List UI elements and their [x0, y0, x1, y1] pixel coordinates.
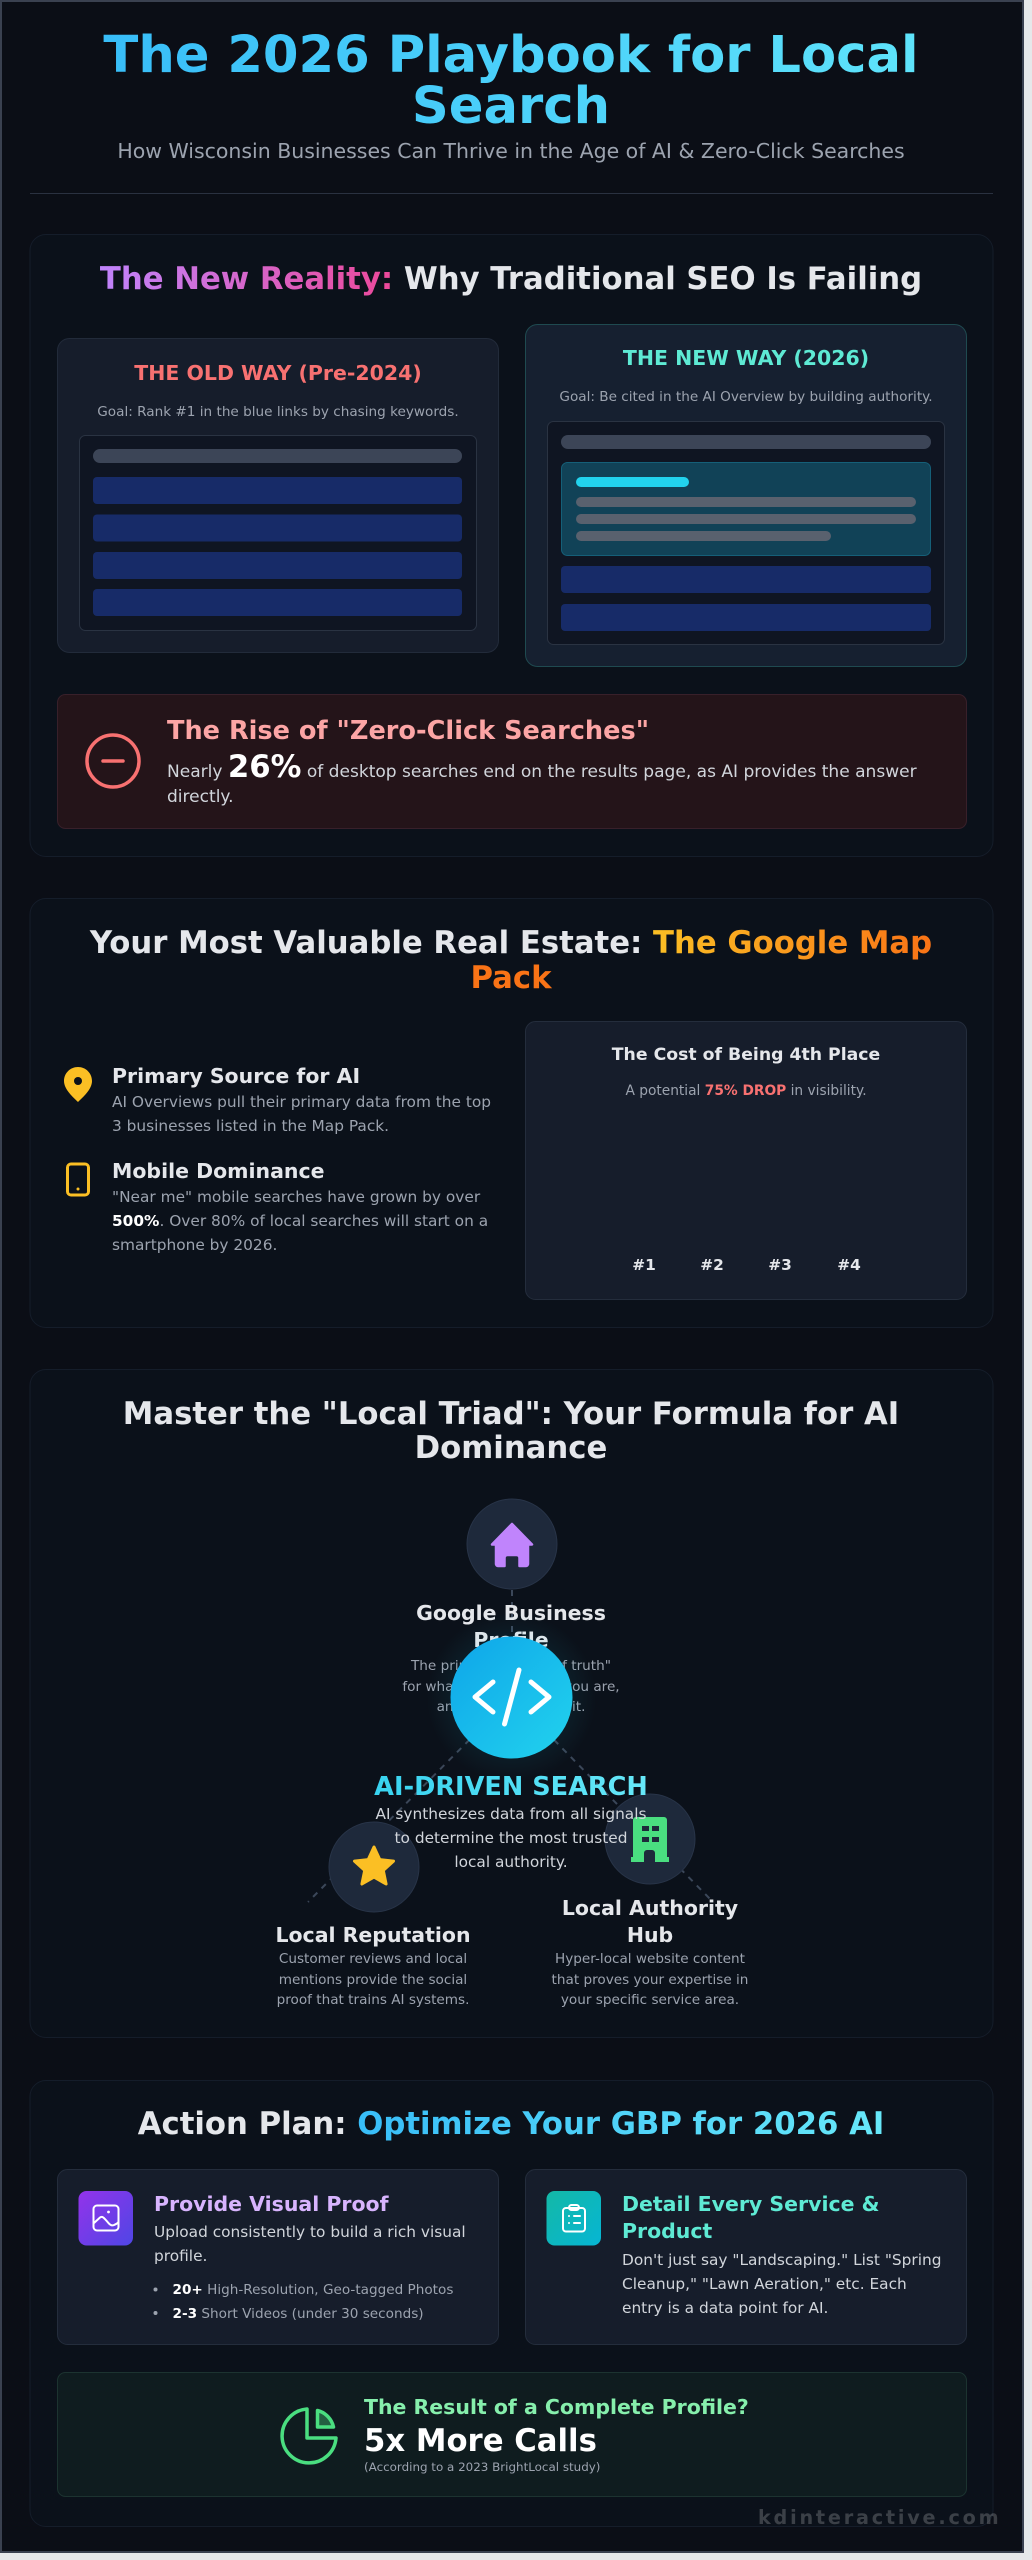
heading: map pack: Pack: [470, 960, 553, 996]
heading: local triad: Dominance: [415, 1430, 607, 1466]
item: primary source for AI: [64, 1064, 491, 1135]
callout heading: The Rise of "Zero-Click Searches": [167, 716, 649, 746]
AI overview search results mockup: [548, 422, 944, 644]
new way goal: Goal: Be cited in the AI Overview by building authority.: [559, 389, 933, 405]
callout source note: (According to a 2023 BrightLocal study): [364, 2460, 600, 2474]
node text: for what you do, where you are,: [402, 1679, 620, 1695]
node heading: Profile: [473, 1628, 549, 1652]
item text: AI Overviews pull their primary data from the top: [112, 1093, 491, 1111]
icon: clipboard: [546, 2191, 601, 2246]
node text: your specific service area.: [561, 1992, 739, 2008]
card text: Don't just say "Landscaping." List "Spring: [622, 2251, 941, 2269]
watermark: kdinteractive.com: [758, 2506, 1001, 2529]
card: visual proof: [58, 2170, 498, 2344]
heading: map pack: [89, 925, 932, 996]
center text: local authority.: [454, 1853, 568, 1871]
icon: map pin: [64, 1067, 92, 1102]
old way heading: THE OLD WAY (Pre-2024): [134, 361, 422, 385]
node: google business profile: [402, 1499, 620, 1715]
chart axis labels: #1: [632, 1256, 656, 1274]
callout: zero-click searches: [58, 694, 966, 828]
old search results mockup: [80, 436, 476, 630]
callout figure: 5x More Calls: [364, 2423, 597, 2459]
card heading: Product: [622, 2219, 713, 2243]
node heading: Hub: [627, 1923, 673, 1947]
callout text: Nearly 26% of desktop searches end on the results page, as AI provides the answer: [167, 749, 917, 785]
connector lines: [308, 1590, 712, 1902]
chart title: The Cost of Being 4th Place: [612, 1045, 880, 1065]
chart axis labels: #2: [700, 1256, 724, 1274]
node heading: [562, 1896, 738, 1947]
node text: Hyper-local website content: [555, 1951, 745, 1967]
card list: 20+ High-Resolution, Geo-tagged Photos: [172, 2282, 453, 2298]
title: The 2026 Playbook for Local: [103, 25, 919, 85]
item: mobile dominance: [68, 1159, 488, 1254]
node text: The primary "source of truth": [410, 1658, 611, 1674]
heading: local triad: Master the "Local Triad": Your Formula for AI: [123, 1396, 899, 1432]
center text: AI synthesizes data from all signals: [376, 1805, 646, 1823]
card list: 2-3 Short Videos (under 30 seconds): [172, 2306, 424, 2322]
card text: Cleanup," "Lawn Aeration," etc. Each: [622, 2275, 907, 2293]
node text: that proves your expertise in: [552, 1972, 748, 1988]
center text: [376, 1805, 646, 1871]
node heading: Local Authority: [562, 1896, 738, 1920]
node text: proof that trains AI systems.: [277, 1992, 469, 2008]
node icon: house: [467, 1499, 557, 1589]
panel: google map pack: [30, 898, 993, 1328]
node text: [552, 1951, 748, 2008]
item text: "Near me" mobile searches have grown by over: [112, 1188, 481, 1206]
node text: Customer reviews and local: [279, 1951, 467, 1967]
heading: local triad: [123, 1396, 899, 1466]
node text: [277, 1951, 469, 2008]
callout text: directly.: [167, 787, 234, 807]
card text: [622, 2251, 941, 2317]
center node: AI-driven search: [374, 1612, 648, 1871]
callout text: [167, 749, 917, 807]
node text: mentions provide the social: [279, 1972, 467, 1988]
panel: action plan: [30, 2080, 993, 2526]
chart subtitle: A potential 75% DROP in visibility.: [625, 1083, 867, 1099]
chart panel: cost of being 4th place: [526, 1022, 966, 1300]
title: Search: [412, 76, 610, 136]
card heading: [622, 2192, 879, 2243]
node icon: building: [605, 1794, 695, 1884]
node icon: star: [329, 1822, 419, 1912]
item text: 3 businesses listed in the Map Pack.: [112, 1117, 389, 1135]
card: detail every service: [526, 2170, 966, 2344]
item heading: Primary Source for AI: [112, 1064, 360, 1088]
card list: [154, 2282, 453, 2322]
item text: smartphone by 2026.: [112, 1236, 277, 1254]
subtitle: How Wisconsin Businesses Can Thrive in the Age of AI & Zero-Click Searches: [117, 139, 905, 163]
node text: and how to contact it.: [437, 1699, 585, 1715]
center icon: code: [426, 1612, 596, 1782]
chart axis labels: #4: [837, 1256, 861, 1274]
panel: the new way: [526, 324, 966, 666]
node text: [402, 1658, 620, 1715]
node heading: Local Reputation: [275, 1923, 471, 1947]
heading: map pack: Your Most Valuable Real Estate: The Google Map: [89, 925, 932, 961]
card heading: Detail Every Service &: [622, 2192, 879, 2216]
panel: the new reality: [30, 234, 993, 856]
item text: [112, 1093, 491, 1135]
icon: image: [78, 2191, 133, 2246]
chart axis labels: [632, 1256, 861, 1274]
callout heading: The Result of a Complete Profile?: [364, 2395, 749, 2419]
card text: [154, 2223, 466, 2265]
center heading: AI-DRIVEN SEARCH: [374, 1772, 648, 1802]
item text: 500%. Over 80% of local searches will start on a: [112, 1212, 488, 1230]
card heading: Provide Visual Proof: [154, 2192, 390, 2216]
old way goal: Goal: Rank #1 in the blue links by chasing keywords.: [97, 404, 459, 420]
card text: profile.: [154, 2247, 207, 2265]
center text: to determine the most trusted: [395, 1829, 627, 1847]
icon: pie chart: [282, 2409, 336, 2463]
item heading: Mobile Dominance: [112, 1159, 324, 1183]
heading: action plan: Action Plan: Optimize Your GBP for 2026 AI: [138, 2106, 884, 2142]
panel: the old way: [58, 338, 498, 652]
title: [103, 25, 919, 136]
chart axis labels: #3: [768, 1256, 792, 1274]
panel: local triad: [30, 1370, 993, 2038]
new way heading: THE NEW WAY (2026): [623, 346, 869, 370]
callout: result of a complete profile: [58, 2372, 966, 2496]
card text: entry is a data point for AI.: [622, 2299, 828, 2317]
icon: minus circle: [87, 735, 139, 787]
node: local reputation: [275, 1822, 471, 2008]
icon: phone: [68, 1164, 88, 1195]
heading: the new reality: The New Reality: Why Traditional SEO Is Failing: [100, 261, 922, 297]
node heading: Google Business: [416, 1601, 606, 1625]
card text: Upload consistently to build a rich visual: [154, 2223, 466, 2241]
node heading: [416, 1601, 606, 1652]
item text: [112, 1188, 488, 1254]
node: local authority hub: [552, 1794, 748, 2008]
